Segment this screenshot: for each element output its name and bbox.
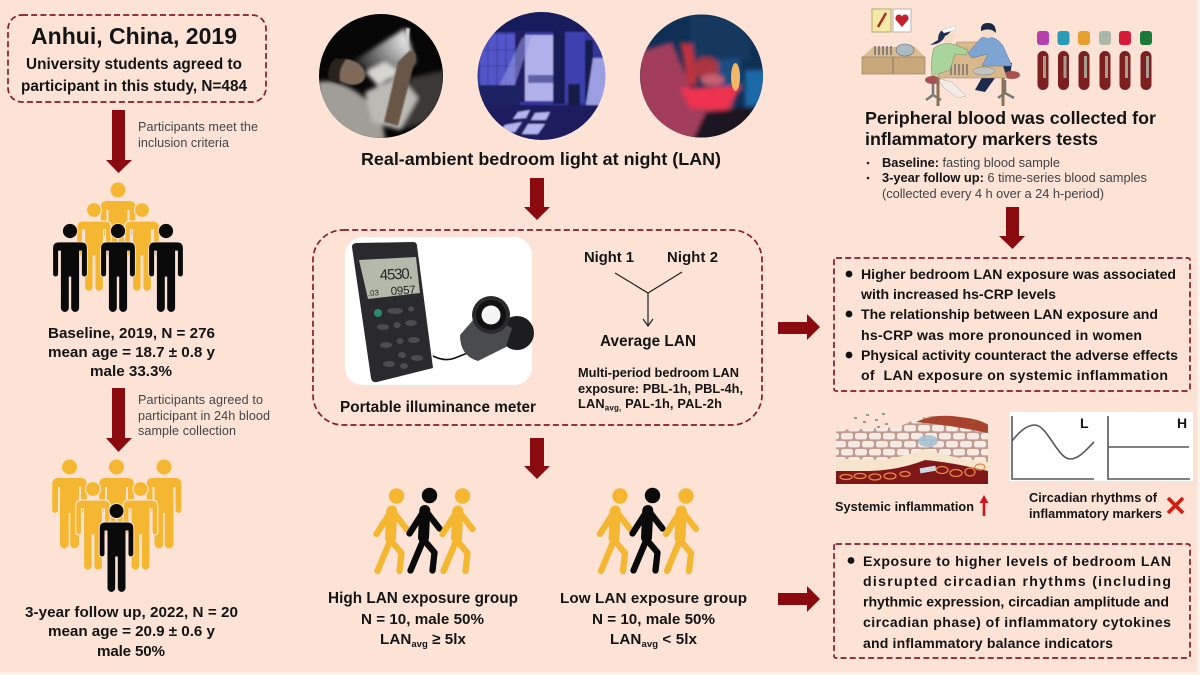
heading: real-ambient bedroom light: Real-ambient bedroom light at night (LAN) [361, 149, 721, 169]
label: systemic inflammation: Systemic inflammation [835, 500, 974, 514]
text: high exposure group [328, 590, 518, 650]
text: low exposure group: N = 10, male 50% [592, 611, 715, 628]
text: follow-up statistics: male 50% [97, 643, 165, 660]
text: sampling schedule [867, 155, 1147, 201]
image: portable illuminance meter: 0957 [390, 284, 416, 298]
label: circadian rhythms [1029, 491, 1162, 521]
panel: hs-CRP findings: with increased hs-CRP levels [860, 286, 1056, 302]
text: high exposure group: LAN [380, 631, 411, 648]
text: baseline statistics [48, 325, 216, 380]
panel: circadian findings: Exposure to higher levels of bedroom LAN [863, 553, 1171, 569]
arrow: down to hs-CRP findings [999, 207, 1025, 249]
chart: circadian rhythm L and H: L [1080, 415, 1089, 431]
panel: study recruitment [8, 15, 266, 102]
text: inclusion criteria note: Participants meet the [138, 120, 258, 134]
text: high exposure group: ≥ 5lx [428, 631, 467, 648]
text: multi-period exposure: LAN [578, 396, 605, 411]
text: high exposure group: N = 10, male 50% [361, 611, 484, 628]
text: inclusion criteria note [138, 120, 258, 150]
panel: hs-CRP findings: of LAN exposure on systemic inflammation [861, 367, 1168, 383]
label: circadian rhythms: Circadian rhythms of [1029, 491, 1158, 505]
text: follow-up statistics [25, 604, 238, 660]
text: low exposure group [560, 590, 747, 650]
text: sampling schedule: Baseline: fasting blood sample [882, 155, 1060, 170]
image: portable illuminance meter [345, 237, 534, 385]
arrow: to hs-CRP findings [778, 314, 820, 340]
text: baseline statistics: male 33.3% [90, 363, 172, 380]
image: portable illuminance meter: 4530. [379, 265, 413, 284]
text: multi-period exposure: Multi-period bedroom LAN [578, 365, 739, 380]
arrow: down to follow up [106, 388, 132, 452]
text: blood collection consent note [138, 393, 270, 438]
heading: location and year: Anhui, China, 2019 [31, 23, 237, 49]
panel: circadian findings: rhythmic expression, circadian amplitude and [863, 594, 1169, 610]
panel: circadian findings: and inflammatory balance indicators [863, 635, 1113, 651]
photo: moonlit bedroom [478, 12, 606, 140]
panel: hs-CRP findings: hs-CRP was more pronounced in women [861, 327, 1142, 343]
text: recruited students: participant in this study, N=484 [21, 78, 247, 95]
text: recruited students: University students agreed to [26, 56, 242, 73]
text: blood collection consent note: sample collection [138, 424, 236, 438]
arrow: down to measurement panel [524, 178, 550, 220]
photo: bedroom with red lamp [640, 14, 763, 138]
text: high exposure group: High LAN exposure group [328, 590, 518, 607]
text: baseline statistics: mean age = 18.7 ± 0.8 y [48, 344, 216, 361]
text: low exposure group: avg [641, 639, 658, 650]
heading: blood collection [865, 108, 1156, 149]
icon: baseline participant group [53, 182, 183, 312]
diagram: nights averaged arrow [615, 272, 682, 326]
chart: circadian rhythm L and H: H [1177, 415, 1187, 431]
text: recruited students [21, 56, 247, 95]
text: blood collection consent note: Participants agreed to [138, 393, 263, 407]
text: sampling schedule: 3-year follow up: 6 time-series blood samples [882, 170, 1147, 185]
label: night 2: Night 2 [667, 250, 718, 266]
arrow: down to baseline [106, 110, 132, 173]
text: sampling schedule: (collected every 4 h over a 24 h-period) [882, 186, 1104, 201]
text: low exposure group: LAN [610, 631, 641, 648]
illustration: blood collection scene [862, 9, 1020, 106]
arrow: to circadian findings [778, 586, 820, 612]
panel: hs-CRP findings: Higher bedroom LAN exposure was associated [861, 266, 1176, 282]
panel: circadian findings [834, 544, 1190, 658]
heading: blood collection: inflammatory markers tests [865, 129, 1098, 149]
label: average LAN: Average LAN [600, 333, 696, 350]
illustration: inflamed tissue [836, 413, 988, 484]
text: follow-up statistics: 3-year follow up, 2022, N = 20 [25, 604, 238, 621]
arrow: down to exposure groups [524, 438, 550, 479]
text: blood collection consent note: participant in 24h blood [138, 409, 270, 423]
icon: high exposure walkers [376, 488, 472, 571]
label: meter caption: Portable illuminance meter [340, 399, 536, 416]
label: circadian rhythms: inflammatory markers [1029, 507, 1162, 521]
text: low exposure group: Low LAN exposure group [560, 590, 747, 607]
text: baseline statistics: Baseline, 2019, N = 276 [48, 325, 215, 342]
panel: hs-CRP findings [834, 258, 1190, 391]
icon: low exposure walkers [600, 488, 696, 571]
image: portable illuminance meter: .03 [368, 288, 380, 298]
icon: red up arrow [980, 495, 988, 516]
icon: six blood tubes [1037, 31, 1152, 90]
text: multi-period exposure: exposure: PBL-1h, PBL-4h, [578, 381, 743, 396]
panel: hs-CRP findings: The relationship between LAN exposure and [861, 306, 1158, 322]
label: night 1: Night 1 [584, 250, 634, 266]
panel: circadian findings: disrupted circadian rhythms (including [863, 573, 1171, 589]
text: multi-period exposure: PAL-1h, PAL-2h [621, 396, 722, 411]
text: high exposure group: avg [411, 639, 428, 650]
panel: LAN measurement [313, 230, 762, 425]
photo: person using phone in bed [319, 14, 443, 138]
panel: circadian findings: circadian phase) of inflammatory cytokines [863, 614, 1171, 630]
text: low exposure group: < 5lx [658, 631, 698, 648]
text: inclusion criteria note: inclusion criteria [138, 136, 229, 150]
heading: blood collection: Peripheral blood was collected for [865, 108, 1156, 128]
panel: hs-CRP findings: Physical activity counteract the adverse effects [861, 347, 1178, 363]
text: multi-period exposure [578, 365, 743, 412]
icon: follow-up participant group [52, 460, 181, 592]
text: follow-up statistics: mean age = 20.9 ± 0.6 y [48, 623, 216, 640]
icon: red cross [1168, 498, 1183, 513]
text: multi-period exposure: avg, [605, 404, 621, 412]
chart: circadian rhythm L and H [1010, 412, 1193, 481]
